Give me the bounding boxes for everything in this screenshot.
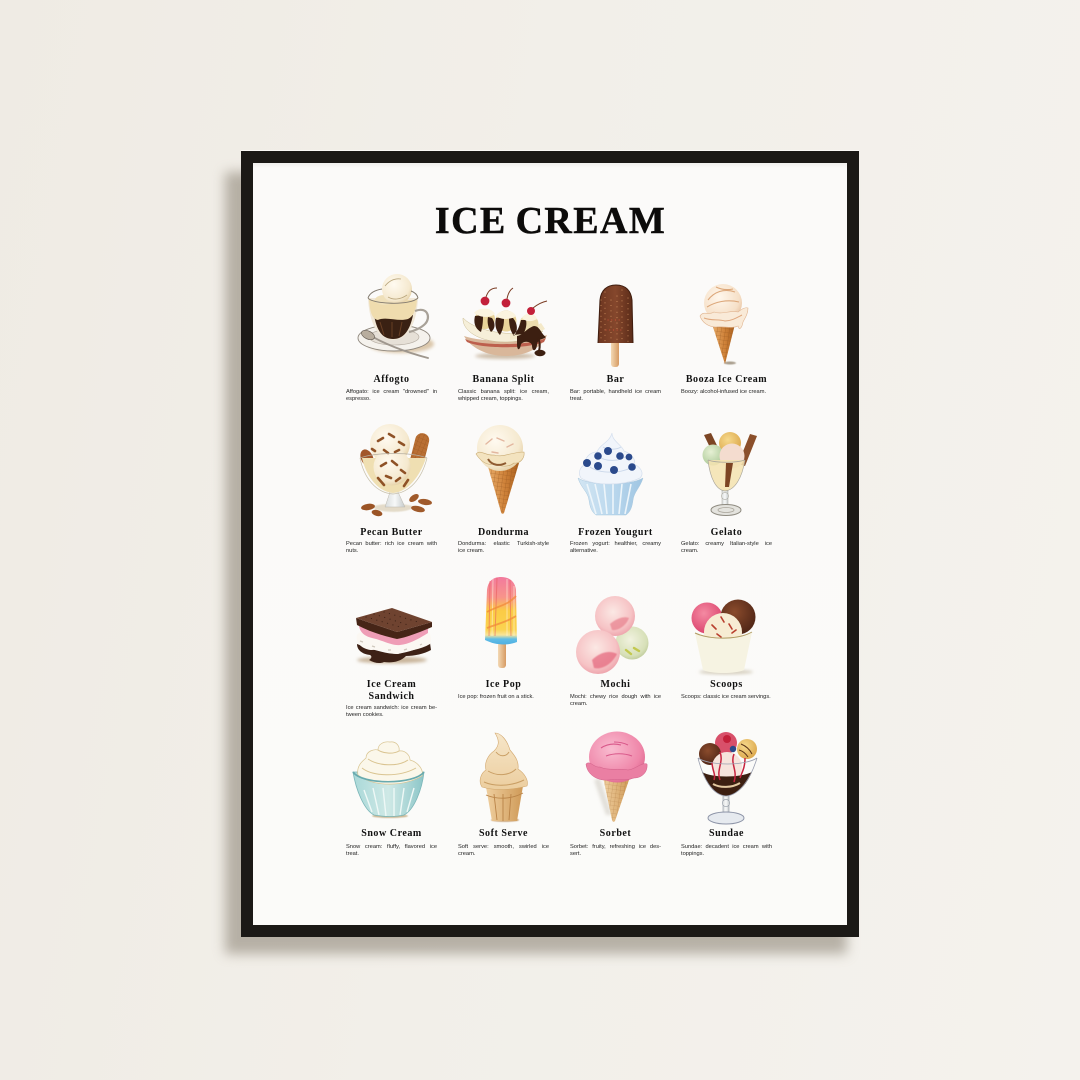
panel: poster sheet xyxy=(253,163,847,925)
icon: frozen yogurt cup xyxy=(578,433,644,516)
icon: booza cone xyxy=(700,284,748,366)
description: Ice pop: frozen fruit on a stick. xyxy=(458,694,534,700)
description: Soft serve: smooth, swirled ice xyxy=(458,844,549,850)
title: ICE CREAM xyxy=(435,200,666,242)
black picture frame xyxy=(241,151,859,937)
name: Sundae xyxy=(709,828,744,839)
name xyxy=(367,679,416,702)
name: Gelato xyxy=(711,526,742,538)
item: Ice Cream Sandwich xyxy=(346,608,437,718)
name: Ice Cream xyxy=(367,679,416,690)
frame shadow xyxy=(225,172,847,954)
description: whipped cream, toppings. xyxy=(458,396,523,402)
description xyxy=(570,844,661,858)
name: Ice Pop xyxy=(486,679,521,690)
description xyxy=(681,844,772,858)
name: Frozen Yougurt xyxy=(578,526,653,538)
description: Boozy: alcohol-infused ice cream. xyxy=(681,388,766,394)
description xyxy=(346,704,437,718)
description: espresso. xyxy=(346,396,371,402)
description: cream. xyxy=(681,548,698,554)
description: Sorbet: fruity, refreshing ice des- xyxy=(570,844,661,850)
item: Snow Cream xyxy=(346,742,437,856)
name: Mochi xyxy=(601,679,630,690)
description: treat. xyxy=(570,396,583,402)
description: Bar: portable, handheld ice cream xyxy=(570,388,661,394)
description: Gelato: creamy Italian-style ice xyxy=(681,540,772,546)
name: Snow Cream xyxy=(361,828,422,839)
description xyxy=(346,540,437,554)
icon: ice pop xyxy=(485,577,517,668)
name: Affogto xyxy=(373,374,410,385)
item: Affogato xyxy=(346,274,437,402)
description xyxy=(458,540,549,554)
description: Frozen yogurt: healthier, creamy xyxy=(570,540,661,546)
icon: sundae glass xyxy=(671,727,782,822)
name: Soft Serve xyxy=(479,828,528,839)
name: Sorbet xyxy=(600,828,631,839)
item: Banana Split xyxy=(458,288,549,402)
item: Frozen Yougurt xyxy=(570,433,661,554)
icon: ice cream sandwich xyxy=(356,608,432,666)
icon: banana split xyxy=(462,288,548,361)
item: Dondurma xyxy=(458,425,549,554)
description xyxy=(570,388,661,402)
icon: mochi xyxy=(576,596,648,674)
name: Sandwich xyxy=(368,690,415,702)
icon: pecan butter glass xyxy=(360,424,432,516)
description: treat. xyxy=(346,850,359,856)
item: Scoops xyxy=(681,600,771,700)
name: Scoops xyxy=(710,679,743,690)
icon: affogato xyxy=(358,274,436,359)
description: toppings. xyxy=(681,850,704,856)
item: Ice Pop xyxy=(458,577,534,700)
icon: sorbet cone xyxy=(560,727,671,822)
name: Banana Split xyxy=(473,374,534,385)
description: Classic banana split: ice cream, xyxy=(458,388,549,394)
item: Gelato xyxy=(681,432,772,554)
item: Sorbet xyxy=(570,727,661,857)
description: Ice cream sandwich: ice cream be- xyxy=(346,704,437,710)
icon: gelato glass xyxy=(702,432,757,516)
item: Pecan Butter xyxy=(346,424,437,554)
description: sert. xyxy=(570,850,581,856)
description xyxy=(458,388,549,402)
description: Affogato: ice cream "drowned" in xyxy=(346,388,437,394)
name: Booza Ice Cream xyxy=(686,374,767,385)
description: cream. xyxy=(458,850,475,856)
name: Dondurma xyxy=(478,526,529,538)
description: Dondurma: elastic Turkish-style xyxy=(458,540,549,546)
description xyxy=(570,540,661,554)
description xyxy=(346,388,437,402)
item: Bar xyxy=(570,284,661,402)
icon: scoops cup xyxy=(692,600,756,676)
description: cream. xyxy=(570,700,587,706)
name: Bar xyxy=(607,374,624,385)
description: Scoops: classic ice cream servings. xyxy=(681,694,771,700)
description: ice cream. xyxy=(458,548,484,554)
description: nuts. xyxy=(346,548,358,554)
description: Mochi: chewy rice dough with ice xyxy=(570,694,661,700)
description xyxy=(681,540,772,554)
description: Sundae: decadent ice cream with xyxy=(681,844,772,850)
icon: snow cream bowl xyxy=(352,742,424,819)
name: Pecan Butter xyxy=(360,526,423,538)
icon: chocolate bar xyxy=(598,284,634,367)
description: Snow cream: fluffy, flavored ice xyxy=(346,844,437,850)
item: Mochi xyxy=(570,596,661,706)
icon: soft serve cone xyxy=(448,727,559,822)
item: Booza Ice Cream xyxy=(681,284,767,394)
icon: dondurma cone xyxy=(476,425,524,514)
description xyxy=(570,694,661,706)
item: Sundae xyxy=(681,727,772,857)
description: tween cookies. xyxy=(346,712,384,718)
description: Pecan butter: rich ice cream with xyxy=(346,540,437,546)
description xyxy=(346,844,437,856)
description xyxy=(458,844,549,858)
description: alternative. xyxy=(570,548,598,554)
item: Soft Serve xyxy=(458,727,549,857)
